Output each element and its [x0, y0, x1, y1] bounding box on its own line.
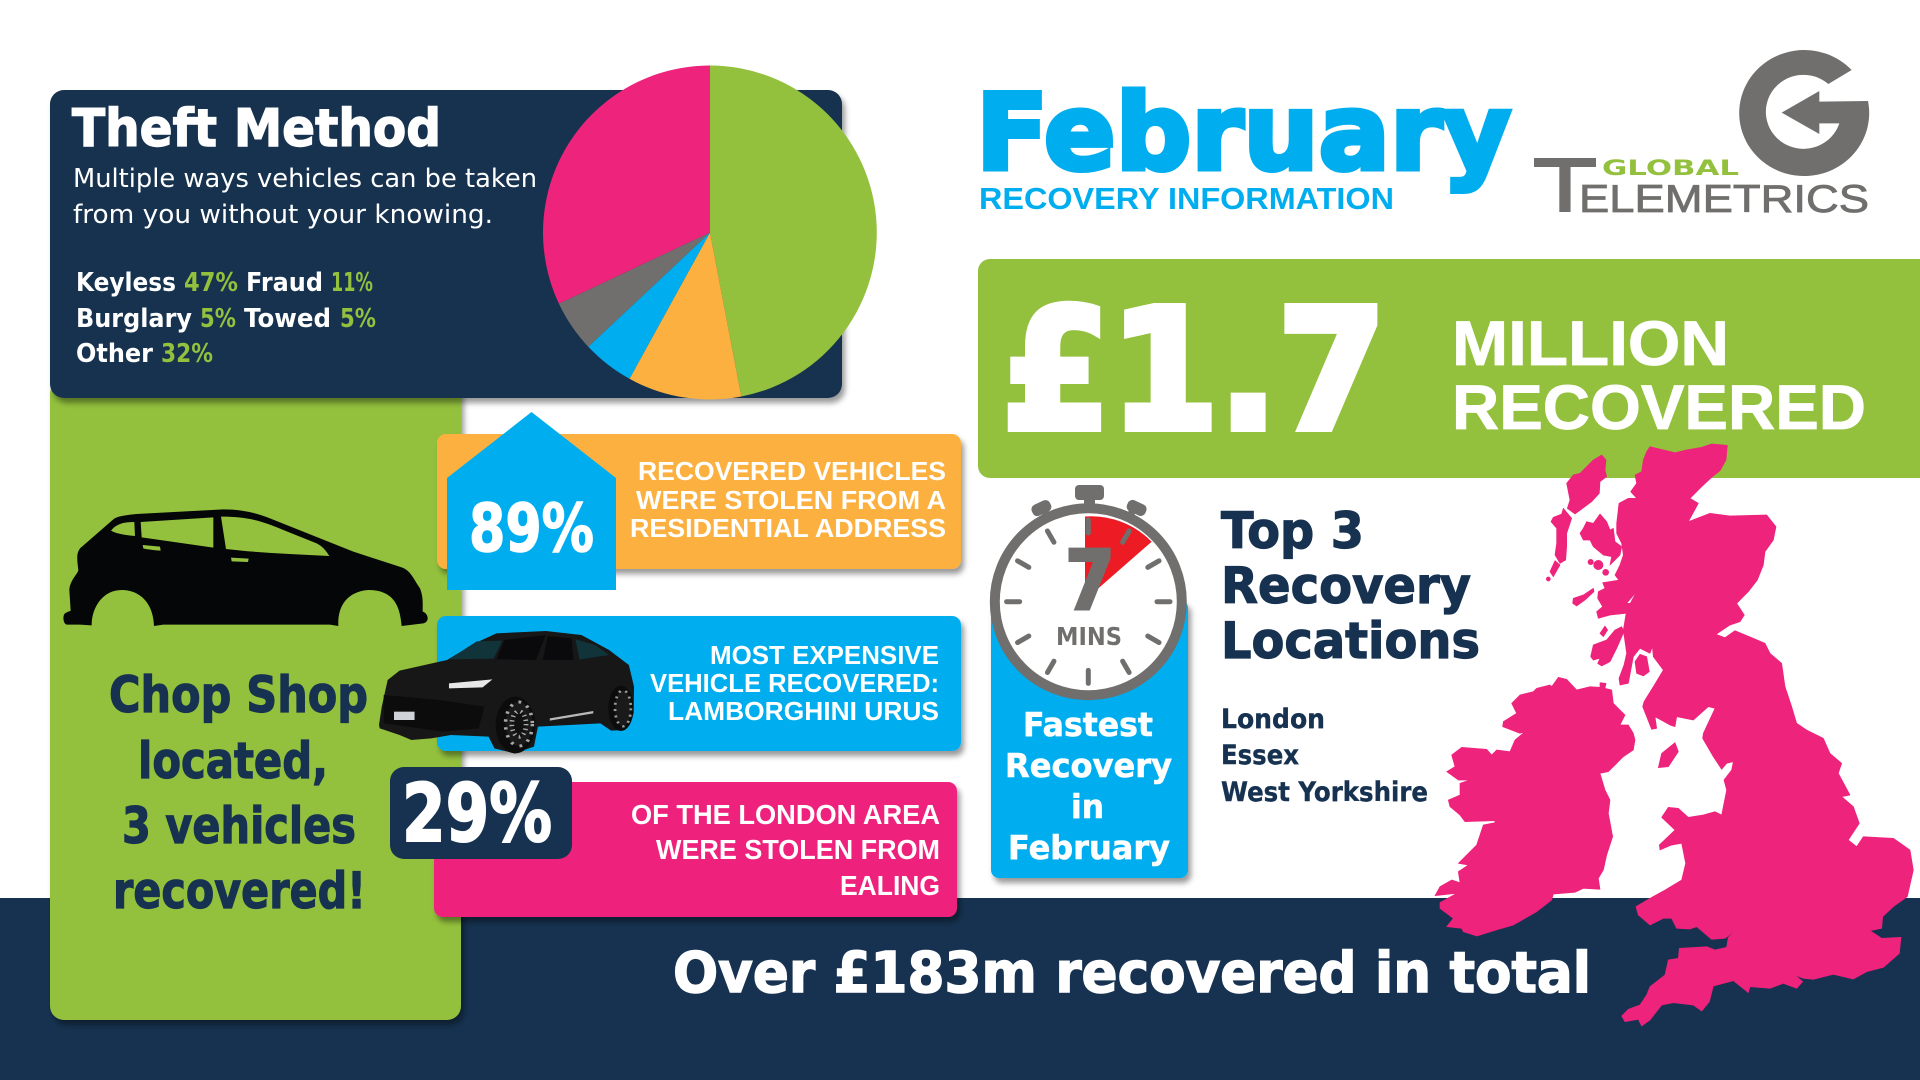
legend percentages: [76, 268, 376, 369]
panel: chop shop: [50, 380, 461, 1020]
expensive vehicle text: MOST EXPENSIVE: [710, 640, 939, 670]
legend percentages: 11%: [331, 268, 373, 298]
chop shop text: 3 vehicles: [122, 797, 356, 855]
footer band: [0, 898, 1920, 1080]
million recovered text: MILLION: [1452, 309, 1729, 379]
list: recovery locations: West Yorkshire: [1221, 777, 1428, 808]
list: recovery locations: London: [1221, 704, 1325, 735]
badge: 29%: 29%: [402, 767, 552, 860]
logo: global telemetrics: T: [1541, 141, 1589, 229]
legend percentages: Burglary: [76, 304, 192, 334]
panel: theft method: [50, 66, 877, 399]
icon: car silhouette: [63, 509, 428, 626]
legend percentages: 47%: [184, 268, 238, 298]
icon: stopwatch: [995, 485, 1182, 695]
legend percentages: Towed: [244, 304, 331, 334]
panel: most expensive vehicle: [379, 616, 961, 753]
expensive vehicle text: VEHICLE RECOVERED:: [650, 668, 939, 698]
expensive vehicle text: LAMBORGHINI URUS: [668, 696, 939, 726]
fastest recovery text: February: [1008, 828, 1170, 867]
ealing text: EALING: [840, 870, 940, 901]
heading: top 3 recovery locations: Locations: [1221, 612, 1480, 670]
panel: million recovered: [978, 259, 1920, 478]
heading: top 3 recovery locations: Top 3: [1221, 502, 1364, 560]
heading: top 3 recovery locations: [1221, 502, 1480, 670]
legend percentages: Other: [76, 339, 153, 369]
list: recovery locations: Essex: [1221, 740, 1299, 771]
description: from you without your knowing.: [73, 200, 493, 230]
title: RECOVERY INFORMATION: [979, 181, 1394, 216]
expensive vehicle text: [650, 640, 939, 726]
legend percentages: Fraud: [246, 268, 323, 298]
description: Multiple ways vehicles can be taken: [73, 164, 537, 194]
house badge: 89%: 89%: [469, 490, 594, 567]
panel: fastest recovery: [991, 485, 1188, 878]
panel: ealing: [390, 767, 957, 917]
big number: £1.7: [1002, 275, 1386, 468]
chop shop text: recovered!: [113, 862, 366, 920]
million recovered text: RECOVERED: [1452, 373, 1866, 443]
logo: global telemetrics: [1534, 50, 1869, 229]
logo: global telemetrics: ELEMETRICS: [1579, 178, 1869, 221]
heading: theft method: Theft Method: [72, 99, 441, 159]
heading: top 3 recovery locations: Recovery: [1221, 557, 1471, 615]
chop shop text: located,: [138, 732, 328, 790]
residential text: WERE STOLEN FROM A: [636, 485, 946, 515]
fastest recovery text: Fastest: [1023, 705, 1153, 744]
million recovered text: [1452, 309, 1866, 443]
ealing text: [631, 799, 940, 901]
legend percentages: 32%: [161, 339, 213, 369]
icon: stopwatch: MINS: [1056, 622, 1122, 651]
ealing text: WERE STOLEN FROM: [656, 834, 940, 865]
description: [73, 164, 537, 230]
residential text: RECOVERED VEHICLES: [638, 456, 946, 486]
panel: residential address: [437, 412, 961, 590]
residential text: RESIDENTIAL ADDRESS: [630, 513, 946, 543]
icon: stopwatch: 7: [1065, 534, 1115, 629]
chop shop text: Chop Shop: [109, 666, 368, 724]
footer total text: Over £183m recovered in total: [673, 941, 1591, 1006]
fastest recovery text: in: [1071, 787, 1104, 826]
map: uk and ireland: [1435, 444, 1913, 1026]
list: recovery locations: [1221, 704, 1428, 808]
pie chart: theft methods: [543, 66, 877, 399]
residential text: [630, 456, 946, 543]
legend percentages: 5%: [200, 304, 236, 334]
house badge: 89%: [447, 412, 616, 590]
legend percentages: 5%: [340, 304, 376, 334]
fastest recovery text: [1005, 705, 1172, 867]
chop shop text: [109, 666, 368, 920]
image: lamborghini urus: [379, 631, 634, 753]
legend percentages: Keyless: [76, 268, 176, 298]
fastest recovery text: Recovery: [1005, 746, 1172, 785]
title: February: [976, 72, 1511, 194]
logo: global telemetrics: GLOBAL: [1602, 156, 1739, 180]
ealing text: OF THE LONDON AREA: [631, 799, 940, 830]
